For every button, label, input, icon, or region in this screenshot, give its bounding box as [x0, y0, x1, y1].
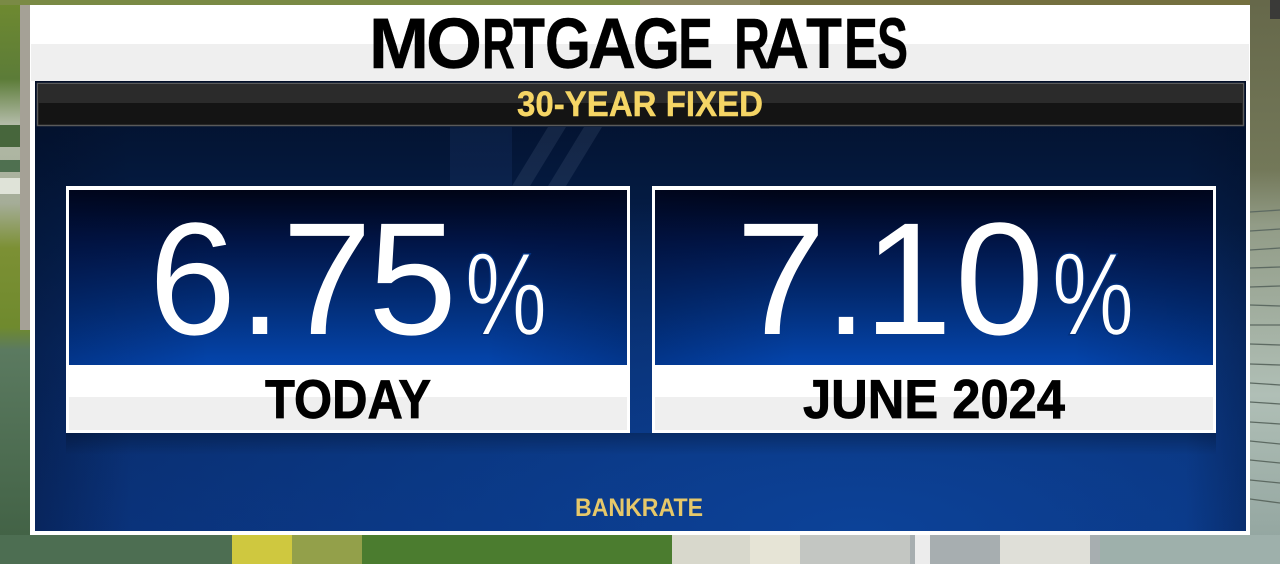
header shaded band: [31, 44, 1249, 81]
rate value today: .: [239, 189, 281, 368]
faint flag in backdrop: [450, 127, 602, 186]
subtitle text: 30-YEAR FIXED: [517, 85, 763, 124]
rate value today: 5: [368, 189, 457, 368]
shadow below cards: [66, 433, 1216, 455]
title: R: [482, 5, 515, 84]
card: today: [66, 186, 630, 433]
title: E: [844, 5, 878, 84]
title: A: [588, 5, 636, 84]
rate value today: 6: [149, 189, 236, 368]
card: june 2024: [652, 186, 1216, 433]
title: S: [877, 5, 908, 84]
rate value june 2024: 0: [955, 189, 1044, 368]
subtitle bar: [38, 84, 1244, 126]
title: A: [764, 5, 809, 84]
title: G: [545, 5, 591, 84]
title: O: [426, 5, 482, 84]
title: R: [734, 5, 770, 84]
rate value june 2024: .: [825, 189, 867, 368]
title: E: [678, 5, 713, 84]
percent sign june 2024: %: [1052, 229, 1134, 361]
source: BANKRATE: [575, 494, 703, 522]
label today: TODAY: [265, 368, 431, 430]
blue panel background: [35, 81, 1246, 531]
rate value june 2024: 7: [736, 189, 826, 368]
title: G: [633, 5, 680, 84]
rate value june 2024: 1: [864, 189, 952, 368]
label june 2024: JUNE 2024: [803, 368, 1065, 430]
title: T: [806, 5, 842, 84]
title: M: [369, 5, 429, 84]
rate value today: 7: [282, 189, 372, 368]
percent sign today: %: [465, 229, 547, 361]
title: T: [513, 5, 545, 84]
